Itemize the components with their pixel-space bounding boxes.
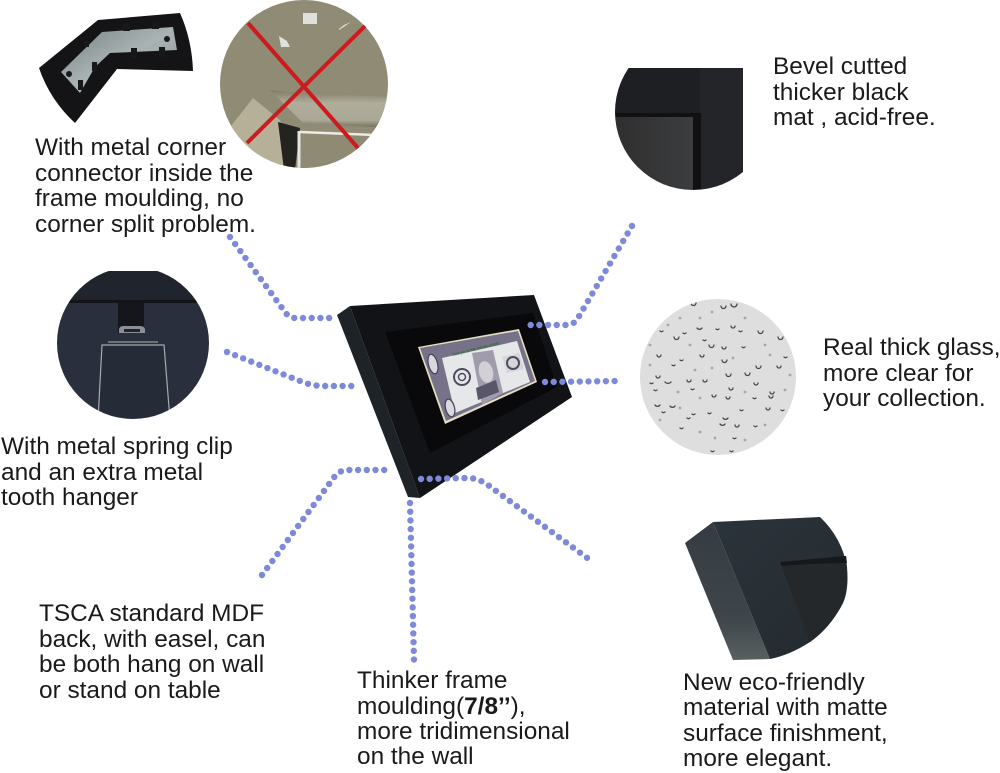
text: real thick glass: Real thick glass,	[823, 334, 1000, 361]
photo: metal spring clip and tooth hanger	[57, 271, 209, 419]
text: matte surface: surface finishment,	[683, 720, 888, 747]
text: thicker frame moulding: on the wall	[357, 743, 474, 770]
text: matte surface: New eco-friendly	[683, 669, 865, 696]
photo: split corner crossed out	[215, 0, 395, 170]
text: metal spring clip: tooth hanger	[1, 484, 138, 511]
text: TSCA MDF back: be both hang on wall	[39, 651, 264, 678]
photo: glass with water droplets	[640, 299, 796, 455]
text: bevel cut mat: thicker black	[773, 79, 909, 106]
text: metal corner connector: frame moulding, no	[35, 185, 244, 212]
text: TSCA MDF back: back, with easel, can	[39, 626, 265, 653]
photo: metal corner connector	[39, 13, 193, 123]
text: TSCA MDF back: TSCA standard MDF	[39, 600, 264, 627]
text: real thick glass: more clear for	[823, 360, 973, 387]
photo: bevel cut black mat	[615, 68, 743, 190]
text: TSCA MDF back: or stand on table	[39, 677, 221, 704]
text: bevel cut mat: Bevel cutted	[773, 53, 907, 80]
text: metal corner connector: connector inside the	[35, 160, 253, 187]
text: bevel cut mat: mat , acid-free.	[773, 104, 936, 131]
text: thicker frame moulding: more tridimensional	[357, 718, 570, 745]
recessed mat	[385, 313, 557, 453]
frame side face	[337, 306, 420, 498]
frame front face	[350, 295, 572, 498]
text: matte surface: more elegant.	[683, 745, 832, 772]
dotted connector lines	[227, 226, 632, 660]
text: metal corner connector: With metal corner	[35, 134, 226, 161]
photo: matte frame surface	[685, 517, 848, 660]
framed dollar bill product photo	[337, 295, 572, 498]
text: thicker frame moulding: moulding(7/8’’),	[357, 693, 526, 720]
text: thicker frame moulding: Thinker frame	[357, 667, 507, 694]
text: metal spring clip: With metal spring clip	[1, 433, 233, 460]
text: metal corner connector: corner split problem.	[35, 211, 256, 238]
text: matte surface: material with matte	[683, 694, 888, 721]
bill caption: Frame your 1st dollar and make a fortune!	[452, 340, 500, 357]
text: real thick glass: your collection.	[823, 385, 986, 412]
dollar bill	[418, 329, 537, 424]
text: metal spring clip: and an extra metal	[1, 459, 203, 486]
